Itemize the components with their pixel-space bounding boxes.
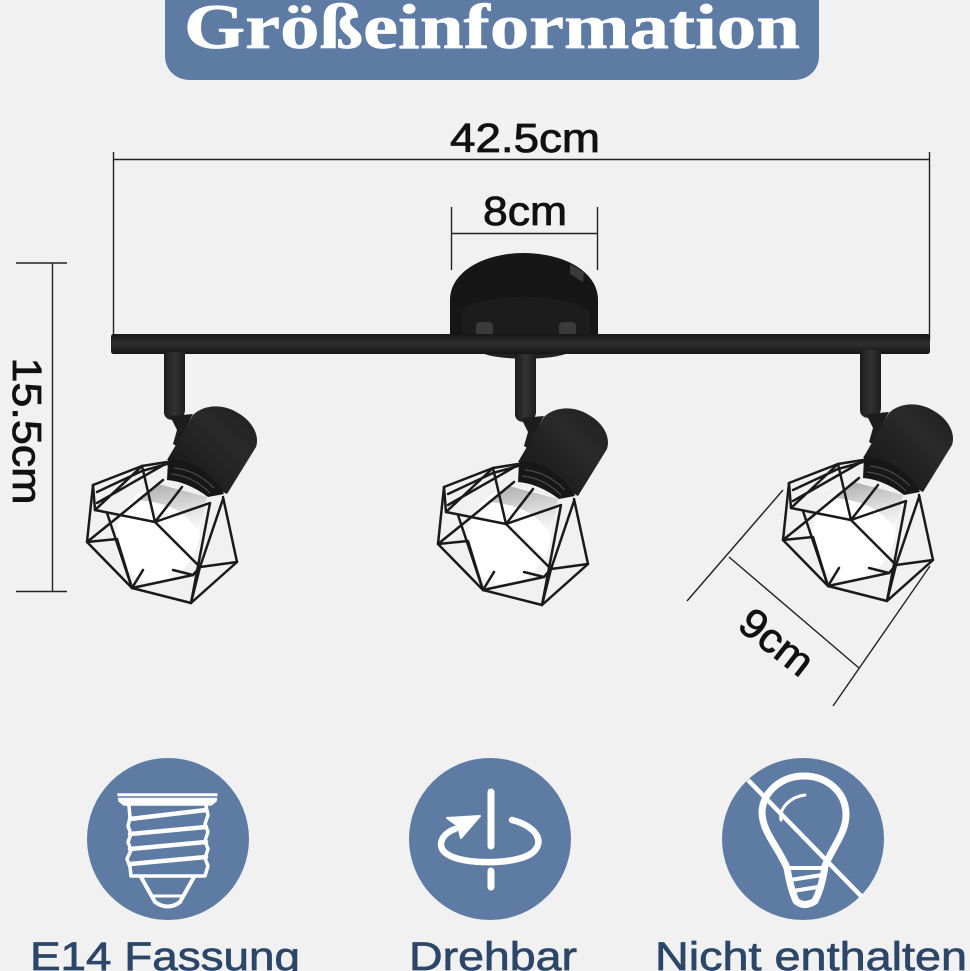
spotlight right	[783, 350, 953, 601]
icon: screw base	[118, 794, 217, 906]
dimension: base width 8cm	[451, 188, 598, 270]
spotlight left	[87, 352, 257, 603]
dimension: total width 42.5cm	[113, 115, 930, 340]
icon: crossed bulb	[748, 776, 862, 904]
icon: rotation arrow	[441, 792, 538, 887]
feature: bulb not included	[722, 758, 884, 920]
title banner	[165, 0, 819, 80]
spotlight centre	[438, 354, 608, 605]
mounting bar	[111, 334, 930, 354]
ceiling base	[450, 253, 598, 359]
feature: E14 socket	[87, 758, 249, 920]
dimension: base width 8cm: 8cm	[483, 188, 567, 234]
feature: rotatable	[409, 758, 571, 920]
dimension: cage diameter 9cm	[687, 490, 930, 706]
dimension: cage diameter 9cm: 9cm	[730, 599, 823, 685]
dimension: height 15.5cm	[4, 263, 67, 592]
dimension: height 15.5cm: 15.5cm	[4, 358, 50, 504]
dimension: total width 42.5cm: 42.5cm	[450, 115, 600, 161]
